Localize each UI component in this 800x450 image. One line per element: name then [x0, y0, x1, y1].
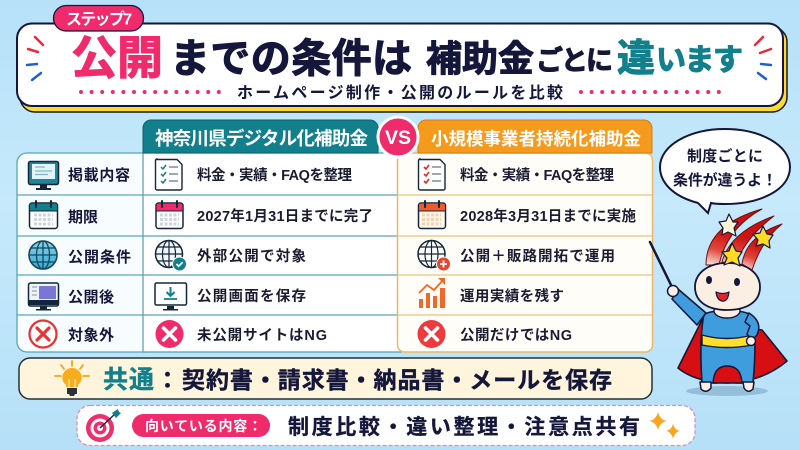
stars — [719, 214, 738, 236]
character: superhero mascot — [650, 209, 787, 396]
Kanagawa row text: 料金・実績・FAQを整理 — [197, 166, 352, 184]
icon: checklist orange — [418, 159, 445, 190]
Kanagawa row text: 2027年1月31日までに完了 — [197, 207, 373, 225]
icon: red cross filled — [418, 320, 446, 348]
icon: monitor teal — [28, 162, 58, 190]
raised arm — [672, 289, 706, 325]
row labels: 公開後 — [68, 288, 114, 306]
Kanagawa row text: 外部公開で対象 — [197, 247, 306, 265]
Kanagawa row text: 未公開サイトはNG — [197, 326, 327, 344]
title text: までの条件は — [170, 37, 412, 81]
title text — [71, 32, 743, 84]
Kanagawa header: 神奈川県デジタル化補助金 — [155, 128, 368, 149]
hair streaks — [706, 209, 762, 265]
callout: common documents: ： — [156, 367, 179, 393]
icon: red cross outline — [30, 320, 56, 348]
icon: growth chart — [419, 278, 445, 308]
title banner — [17, 6, 787, 112]
mouth — [716, 292, 729, 301]
title text: ごとに — [536, 45, 613, 76]
Kanagawa header — [143, 120, 378, 153]
small business row text: 公開＋販路開拓で運用 — [460, 247, 615, 265]
small business row text: 料金・実績・FAQを整理 — [460, 166, 614, 184]
VS badge: VS — [385, 128, 411, 149]
row labels: 公開条件 — [68, 249, 131, 266]
small business row text: 公開だけではNG — [460, 327, 572, 344]
icon: checklist teal — [156, 159, 182, 190]
row labels: 期限 — [68, 209, 98, 226]
icon: calendar pink — [156, 201, 183, 228]
pointer stick — [650, 242, 671, 285]
callout: suitable content — [77, 406, 695, 446]
small business row text: 2028年3月31日までに実施 — [460, 207, 636, 225]
row labels — [68, 166, 131, 344]
body — [701, 310, 755, 383]
label pill — [132, 414, 270, 437]
panel: comparison labels column — [17, 153, 157, 352]
belt — [702, 335, 752, 348]
hip arm — [745, 313, 759, 340]
Kanagawa row text — [197, 166, 373, 344]
step badge — [54, 6, 144, 31]
small business row text: 運用実績を残す — [460, 287, 564, 305]
small business row text — [460, 166, 636, 344]
collar — [714, 304, 740, 318]
callout: suitable content: 制度比較・違い整理・注意点共有 — [288, 416, 640, 439]
VS badge — [378, 117, 418, 157]
right burst lines — [755, 37, 771, 79]
step badge: ステップ7 — [66, 10, 132, 28]
left dotted line — [81, 90, 220, 94]
icon: monitor purple — [28, 283, 58, 310]
Kanagawa row text: 公開画面を保存 — [197, 287, 306, 305]
small business header — [418, 120, 652, 153]
small business header: 小規模事業者持続化補助金 — [431, 129, 642, 149]
label pill: 向いている内容： — [145, 418, 262, 434]
panel: small business column — [398, 120, 652, 352]
icon: sparkles — [649, 412, 680, 439]
row labels: 対象外 — [68, 326, 114, 344]
red arch — [713, 366, 742, 383]
eyes — [706, 276, 712, 284]
icon: calendar teal — [30, 201, 58, 228]
right dotted line — [581, 90, 728, 94]
icon: globe with check — [156, 240, 186, 271]
icon: monitor download — [155, 283, 186, 310]
callout: common documents — [19, 358, 652, 399]
callout: common documents: 共通 — [103, 366, 154, 394]
speech bubble — [660, 129, 790, 213]
icon: pink cross filled — [156, 320, 184, 348]
row labels: 掲載内容 — [68, 166, 130, 184]
subtitle: ホームページ制作・公開のルールを比較 — [237, 84, 563, 102]
title text: 公開 — [71, 32, 163, 84]
ground shadow — [686, 386, 768, 396]
feet — [700, 382, 711, 391]
head — [695, 263, 760, 310]
cape — [678, 320, 787, 383]
callout: common documents: 契約書・請求書・納品書・メールを保存 — [182, 367, 612, 393]
title text: 違 — [617, 38, 655, 80]
left burst lines — [27, 37, 43, 80]
icon: globe teal — [29, 241, 57, 269]
title text: 補助金 — [426, 38, 534, 79]
icon: calendar orange — [418, 201, 446, 228]
icon: globe with plus — [418, 240, 450, 271]
icon: light bulb — [55, 361, 89, 396]
panel: Kanagawa column — [143, 120, 401, 352]
speech bubble: 条件が違うよ！ — [673, 171, 777, 189]
icon: target — [86, 409, 121, 442]
speech bubble: 制度ごとに — [687, 147, 763, 165]
title text: います — [656, 44, 743, 77]
